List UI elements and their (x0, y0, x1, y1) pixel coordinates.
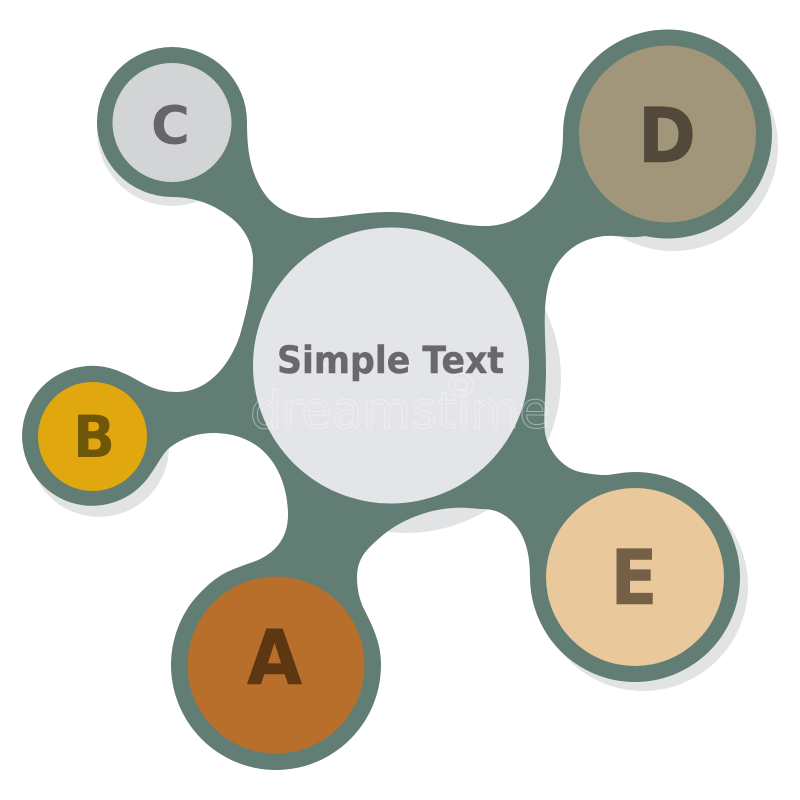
drop shadows (29, 41, 778, 691)
node C: C (151, 96, 190, 157)
heading: Simple Text: Simple Text (277, 339, 504, 382)
watermark: dreamstime (250, 382, 550, 441)
node A (188, 576, 364, 754)
node C (112, 63, 232, 182)
central circle (253, 228, 529, 504)
node E (546, 488, 724, 666)
node E: E (610, 533, 658, 622)
node B: B (73, 403, 115, 471)
node D: D (638, 91, 696, 180)
node B (38, 382, 147, 491)
node D (579, 46, 756, 222)
node A: A (247, 613, 302, 702)
